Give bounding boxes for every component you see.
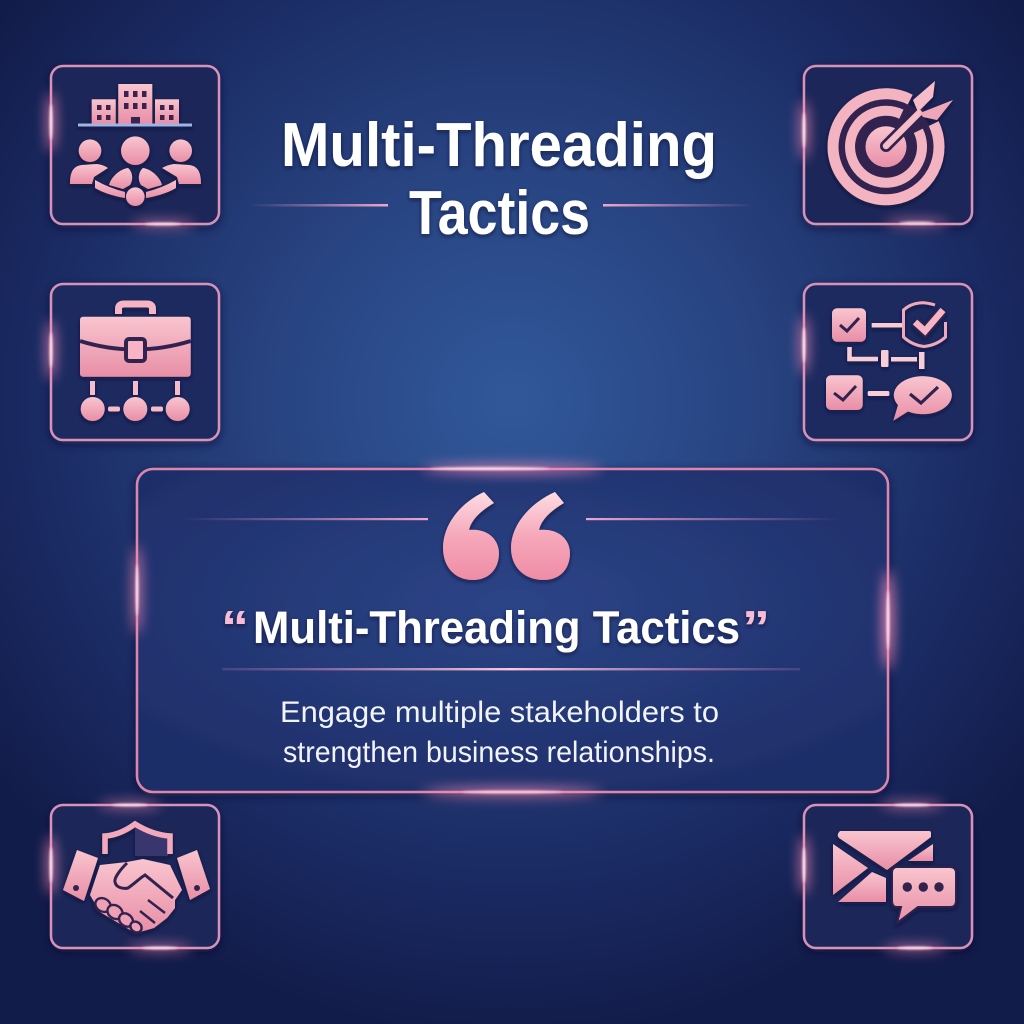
body text: strengthen business relationships. bbox=[283, 736, 715, 769]
icon: briefcase with nodes bbox=[80, 304, 191, 421]
quote rules bbox=[182, 518, 840, 520]
title rules bbox=[248, 204, 755, 206]
panel: target card bbox=[799, 66, 972, 227]
panel: checklist card bbox=[799, 284, 972, 440]
quote heading: ” bbox=[742, 601, 770, 653]
body text bbox=[280, 696, 719, 769]
panel: main quote bbox=[132, 464, 894, 797]
panel: briefcase card bbox=[46, 284, 219, 440]
title bbox=[281, 111, 717, 248]
icon: checklist flow bbox=[826, 303, 952, 421]
icon: quotation mark bbox=[443, 492, 570, 580]
body text: Engage multiple stakeholders to bbox=[280, 696, 719, 729]
icon: target with arrow bbox=[833, 81, 953, 200]
panel: handshake card bbox=[46, 801, 219, 952]
quote heading: Multi-Threading Tactics bbox=[253, 602, 740, 653]
panel: stakeholder card bbox=[46, 66, 219, 228]
icon: buildings and people bbox=[70, 84, 201, 206]
title: Multi-Threading bbox=[281, 111, 717, 180]
panel: email card bbox=[799, 801, 972, 952]
icon: envelope with chat bubble bbox=[833, 831, 956, 923]
title: Tactics bbox=[409, 179, 590, 248]
divider bbox=[222, 668, 800, 670]
icon: handshake with shield bbox=[63, 824, 210, 935]
quote heading: “ bbox=[221, 601, 249, 653]
